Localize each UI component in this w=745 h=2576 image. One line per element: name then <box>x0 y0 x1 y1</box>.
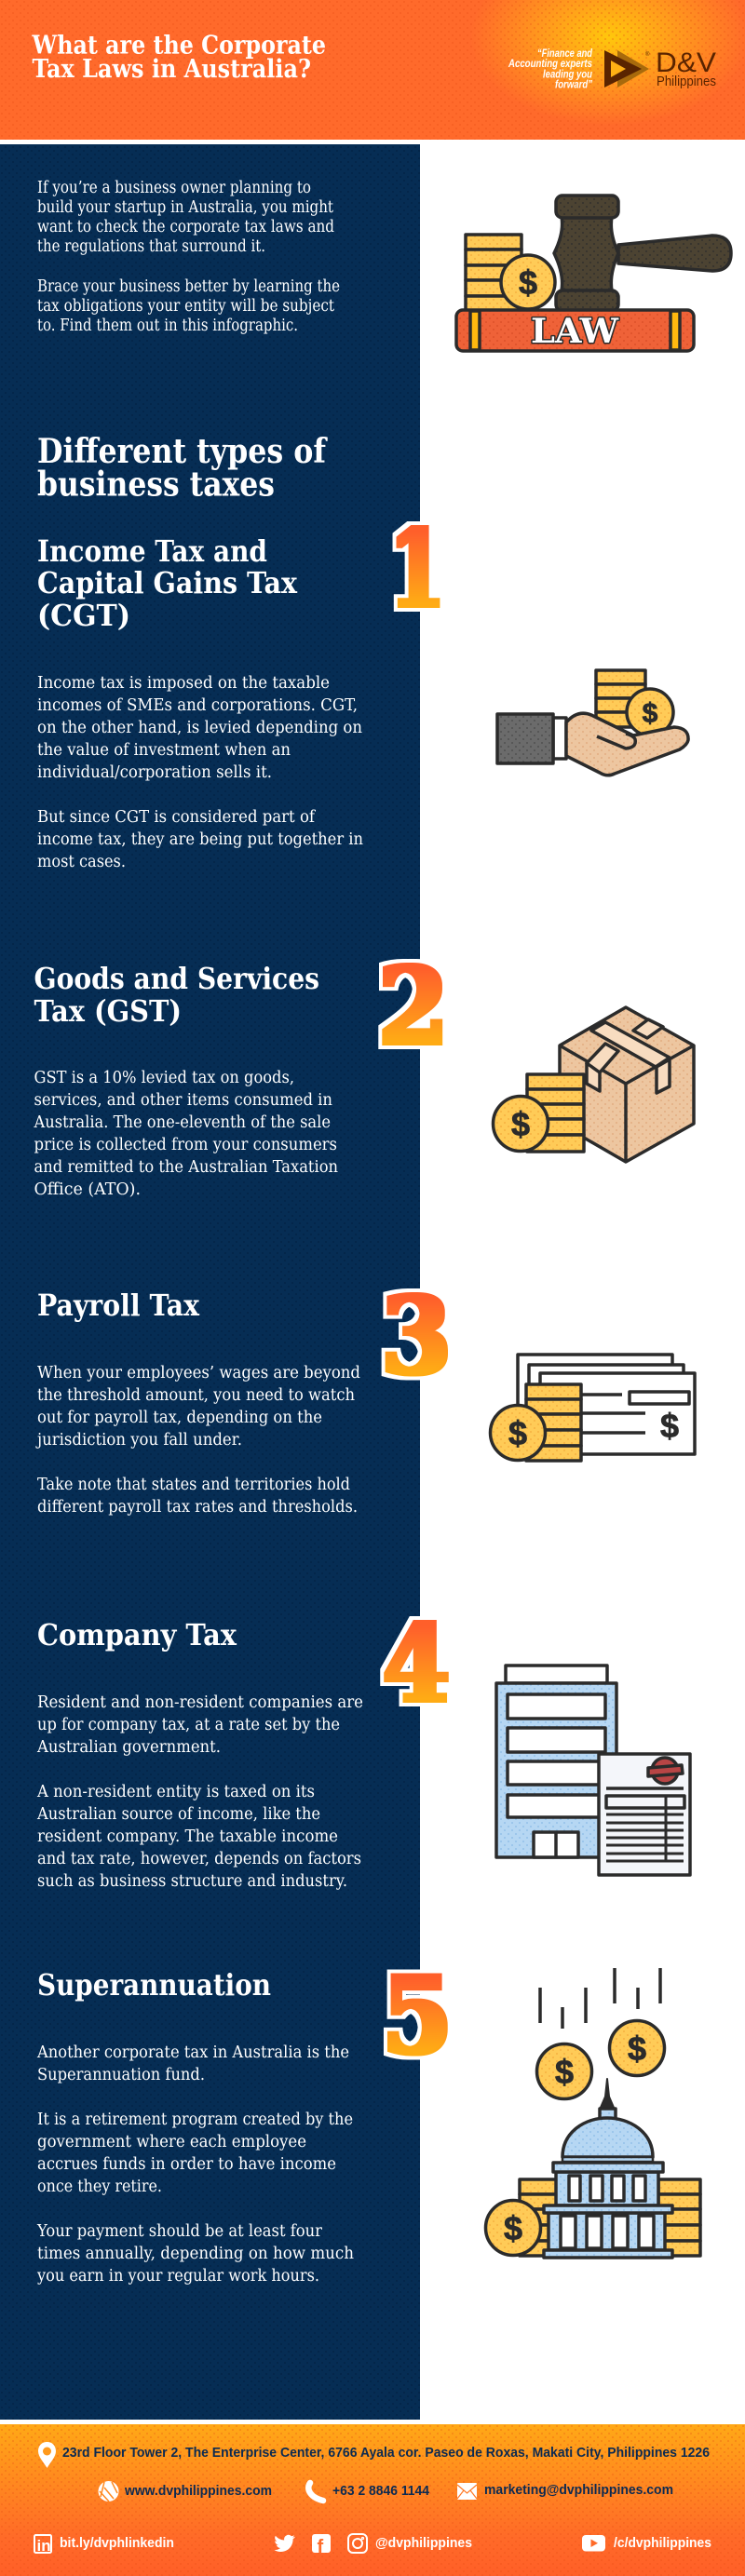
intro text: the regulations that surround it. <box>37 237 265 256</box>
section 4 body: Resident and non-resident companies are <box>37 1693 363 1712</box>
section 3 body: out for payroll tax, depending on the <box>37 1409 322 1427</box>
section 1 body: the value of investment when an <box>37 741 291 760</box>
section 5 body: once they retire. <box>37 2178 162 2196</box>
number 4: 4 <box>383 1601 450 1726</box>
logo: D&V Philippines: D&V <box>656 47 716 78</box>
section 2 body: Australia. The one-eleventh of the sale <box>34 1113 331 1132</box>
section 5 body: Superannuation fund. <box>37 2066 205 2084</box>
number 5: 5 <box>382 1953 453 2078</box>
section 2 body: services, and other items consumed in <box>34 1091 332 1110</box>
logo: D&V Philippines <box>604 47 716 89</box>
section 5 body: government where each employee <box>37 2133 306 2151</box>
section 1 body: most cases. <box>37 853 126 871</box>
icon: cheques with coins: $ <box>660 1407 679 1445</box>
section 4 body: A non-resident entity is taxed on its <box>36 1783 315 1801</box>
section 2 body: and remitted to the Australian Taxation <box>34 1158 338 1177</box>
navy content panel <box>0 144 420 2420</box>
icon: box with coins <box>494 1007 694 1162</box>
section 5 body: Your payment should be at least four <box>36 2222 323 2241</box>
section 3 heading: Payroll Tax <box>37 1288 200 1323</box>
icon: government building with falling coins: $ <box>504 2209 522 2247</box>
logo: D&V Philippines: Philippines <box>657 74 716 89</box>
section 1 body: incomes of SMEs and corporations. CGT, <box>37 696 358 715</box>
section 4 body: and tax rate, however, depends on factors <box>37 1850 361 1868</box>
section 4 body: Australian source of income, like the <box>36 1805 320 1824</box>
title: What are the Corporate <box>32 32 326 60</box>
logo tagline: “Finance and <box>537 47 593 60</box>
section 2 heading: Tax (GST) <box>34 993 182 1029</box>
icon: hand holding coins <box>497 670 688 775</box>
email: marketing@dvphilippines.com <box>484 2482 673 2498</box>
icon: twitter <box>274 2535 295 2552</box>
section 5 body: times annually, depending on how much <box>37 2245 354 2263</box>
intro text: Brace your business better by learning the <box>37 277 340 296</box>
icon: cheques with coins <box>490 1355 695 1461</box>
intro text <box>37 179 340 335</box>
section 3 body: the threshold amount, you need to watch <box>37 1386 355 1405</box>
heading: different types of business taxes: business taxes <box>37 465 275 505</box>
icon: linkedin: in <box>37 2537 51 2555</box>
footer banner <box>0 2424 745 2576</box>
section 1 heading: Income Tax and <box>37 533 267 569</box>
section 3 body: different payroll tax rates and thresholds. <box>37 1498 358 1517</box>
icon: facebook: f <box>317 2537 324 2557</box>
website: www.dvphilippines.com <box>124 2483 272 2499</box>
logo tagline: Accounting experts <box>508 57 592 70</box>
section 5 body: accrues funds in order to have income <box>37 2155 336 2174</box>
section 4 body: such as business structure and industry. <box>37 1872 347 1891</box>
section 2 body: Office (ATO). <box>34 1180 141 1199</box>
logo tagline: forward” <box>555 78 592 91</box>
section 1 body: income tax, they are being put together in <box>37 830 363 849</box>
section 2 body: GST is a 10% levied tax on goods, <box>34 1069 294 1087</box>
icon: cheques with coins: $ <box>508 1414 527 1452</box>
heading: different types of business taxes <box>37 432 328 505</box>
icon: government building with falling coins: $ <box>555 2053 574 2091</box>
title: Tax Laws in Australia? <box>32 55 311 84</box>
youtube handle: /c/dvphilippines <box>614 2535 711 2551</box>
icon: box with coins: $ <box>511 1105 530 1143</box>
number 1: 1 <box>389 506 445 631</box>
section 3 body: Take note that states and territories hold <box>37 1476 350 1494</box>
intro text: If you’re a business owner planning to <box>37 179 311 197</box>
linkedin handle: bit.ly/dvphlinkedin <box>60 2535 174 2551</box>
social handle: @dvphilippines <box>375 2535 472 2551</box>
section 1 heading: (CGT) <box>37 598 130 633</box>
address: 23rd Floor Tower 2, The Enterprise Center, 6766 Ayala cor. Paseo de Roxas, Makati City, Philippines 1226 <box>62 2445 710 2461</box>
icon: gavel on law book with coins <box>456 196 731 351</box>
section 5 body: Another corporate tax in Australia is the <box>36 2043 349 2062</box>
icon: hand holding coins: $ <box>643 698 658 729</box>
title <box>32 32 326 84</box>
intro text: build your startup in Australia, you might <box>37 198 333 217</box>
number 2: 2 <box>378 944 449 1069</box>
section 5 body: you earn in your regular work hours. <box>36 2267 319 2286</box>
section 2 heading <box>34 961 319 1029</box>
icon: instagram <box>348 2534 367 2553</box>
icon: gavel on law book with coins: $ <box>519 263 537 302</box>
icon: youtube <box>582 2535 605 2551</box>
icon: mail <box>457 2483 477 2500</box>
heading: different types of business taxes: Different types of <box>37 432 328 471</box>
section 2 body <box>34 1069 338 1199</box>
section 2 heading: Goods and Services <box>34 961 319 996</box>
section 4 body <box>36 1693 363 1891</box>
section 5 body: It is a retirement program created by the <box>37 2111 353 2129</box>
phone number: +63 2 8846 1144 <box>332 2483 430 2499</box>
section 1 body: Income tax is imposed on the taxable <box>37 674 330 693</box>
intro text: want to check the corporate tax laws and <box>37 218 334 236</box>
intro text: tax obligations your entity will be subject <box>37 297 334 316</box>
header banner <box>0 0 745 140</box>
section 1 body: But since CGT is considered part of <box>37 808 316 827</box>
icon: government building with falling coins <box>486 1968 700 2258</box>
logo tagline: leading you <box>543 67 593 80</box>
section 4 heading: Company Tax <box>37 1617 237 1652</box>
logo tagline <box>508 47 593 91</box>
section 1 body <box>37 674 363 871</box>
icon: globe <box>99 2481 119 2502</box>
section 4 body: up for company tax, at a rate set by the <box>37 1716 340 1734</box>
section 2 body: price is collected from your consumers <box>34 1136 337 1154</box>
section 5 body <box>36 2043 354 2286</box>
icon: office building and tax document <box>496 1666 690 1875</box>
number 3: 3 <box>381 1274 452 1398</box>
section 4 body: Australian government. <box>36 1738 221 1757</box>
section 5 heading: Superannuation <box>37 1967 271 2003</box>
section 1 heading: Capital Gains Tax <box>37 565 298 600</box>
intro text: to. Find them out in this infographic. <box>37 317 298 335</box>
section 1 heading <box>37 533 298 633</box>
section 1 body: on the other hand, is levied depending on <box>37 719 362 737</box>
icon: phone <box>308 2483 323 2501</box>
icon: gavel on law book with coins: LAW <box>531 312 619 351</box>
icon: government building with falling coins: $ <box>628 2030 646 2068</box>
icon: facebook <box>312 2534 331 2557</box>
icon: location pin <box>38 2442 56 2468</box>
section 3 body: jurisdiction you fall under. <box>35 1431 242 1450</box>
section 3 body <box>35 1364 360 1517</box>
section 1 body: individual/corporation sells it. <box>37 763 272 782</box>
logo: D&V Philippines: ® <box>645 51 650 58</box>
section 3 body: When your employees’ wages are beyond <box>37 1364 360 1382</box>
section 4 body: resident company. The taxable income <box>37 1827 338 1846</box>
